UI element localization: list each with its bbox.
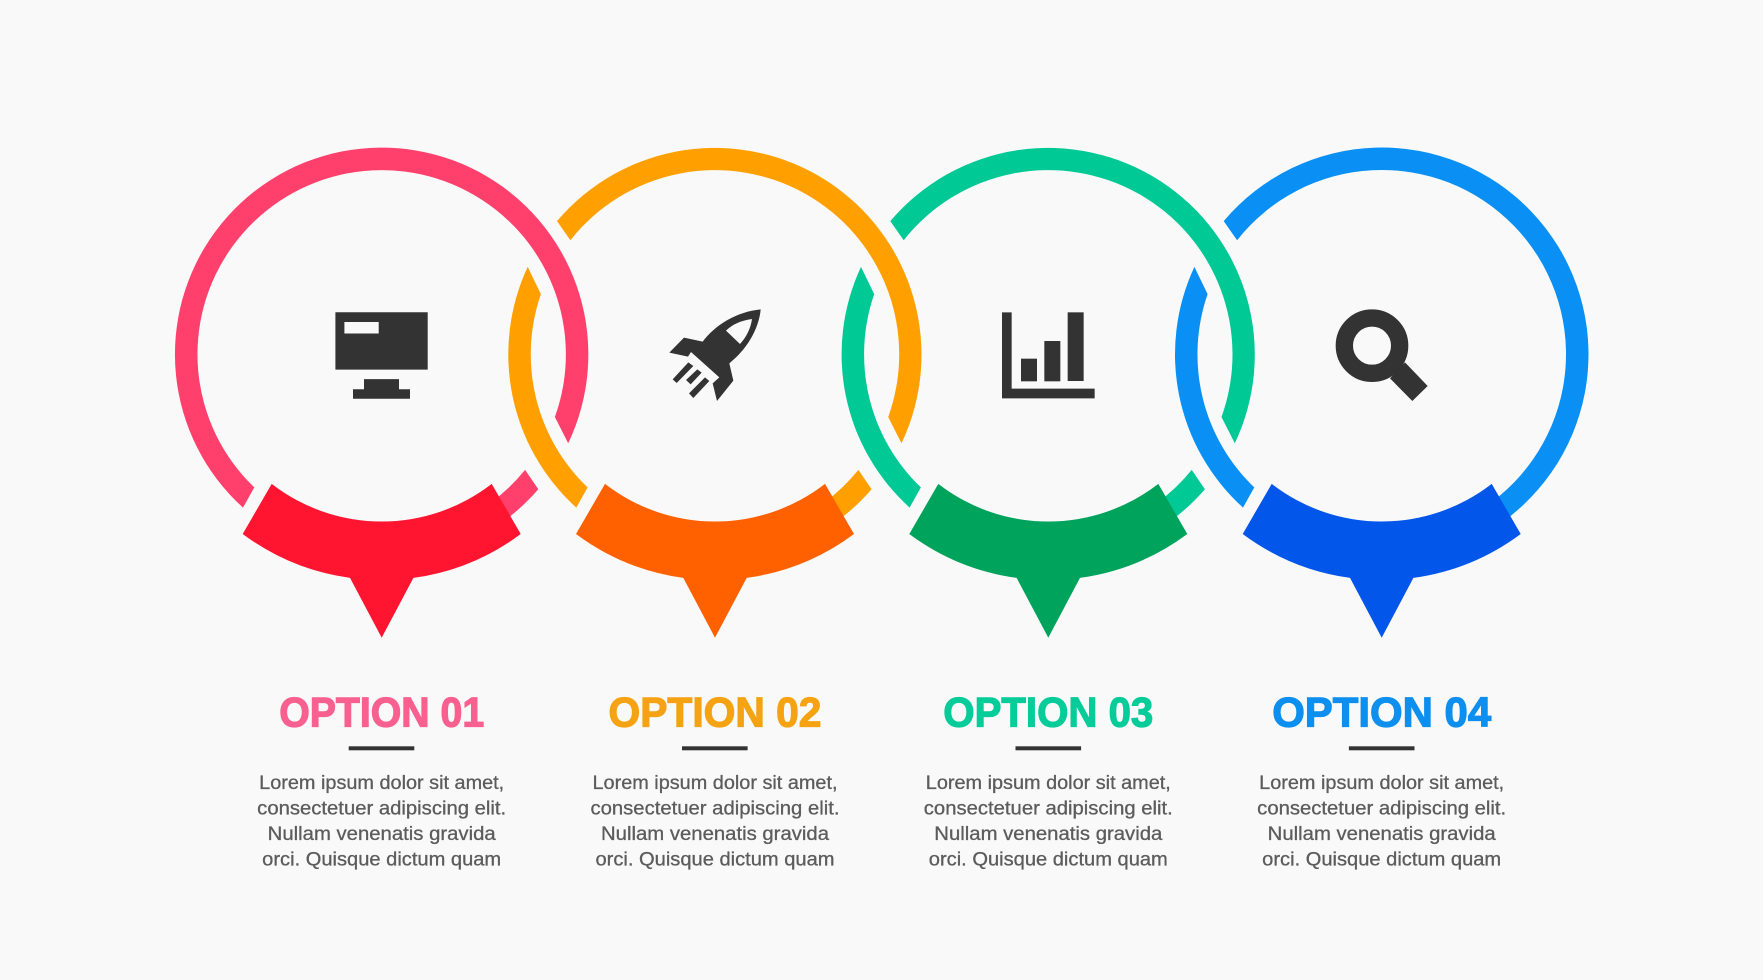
text block: option 04: Nullam venenatis gravida [1268,824,1496,845]
text block: option 04 [1257,773,1506,870]
ring: option 03 [842,148,1255,519]
text block: option 03: Lorem ipsum dolor sit amet, [926,773,1171,794]
divider: option 01 [349,746,414,750]
pointer band: option 01 [243,484,521,638]
ring: option 02 [508,148,921,519]
text block: option 01: Lorem ipsum dolor sit amet, [259,773,504,794]
ring: option 04 [1175,148,1588,519]
text block: option 03 [924,773,1173,870]
text block: option 01 [257,773,506,870]
text block: option 01: consectetuer adipiscing elit. [257,798,506,819]
icon: bar chart [1002,312,1095,398]
text block: option 04: orci. Quisque dictum quam [1262,849,1501,870]
text block: option 02: orci. Quisque dictum quam [596,849,834,870]
text block: option 01: Nullam venenatis gravida [268,824,496,845]
panel: option 01 [175,148,588,870]
text block: option 04: consectetuer adipiscing elit. [1257,798,1506,819]
pointer band: option 02 [576,484,854,638]
icon: monitor [335,312,428,399]
text block: option 02: Lorem ipsum dolor sit amet, [592,773,838,794]
text block: option 04: Lorem ipsum dolor sit amet, [1259,773,1504,794]
heading: option 02: OPTION 02 [608,688,822,736]
panel: option 04 [1175,148,1588,870]
icon: magnifying glass [1344,318,1428,401]
text block: option 02: Nullam venenatis gravida [601,824,829,845]
divider: option 04 [1349,746,1414,750]
text block: option 03: orci. Quisque dictum quam [929,849,1168,870]
text block: option 02 [590,773,840,870]
panel: option 03 [842,148,1255,870]
text block: option 03: consectetuer adipiscing elit. [924,798,1173,819]
pointer band: option 04 [1243,484,1521,638]
text block: option 02: consectetuer adipiscing elit. [590,798,840,819]
heading: option 01: OPTION 01 [279,688,484,736]
text block: option 03: Nullam venenatis gravida [934,824,1163,845]
icon: rocket [669,309,761,401]
ring: option 01 [175,148,588,519]
pointer band: option 03 [909,484,1187,638]
divider: option 03 [1016,746,1081,750]
divider: option 02 [682,746,748,750]
text block: option 01: orci. Quisque dictum quam [262,849,501,870]
heading: option 04: OPTION 04 [1272,688,1492,736]
panel: option 02 [508,148,921,870]
heading: option 03: OPTION 03 [943,688,1153,736]
